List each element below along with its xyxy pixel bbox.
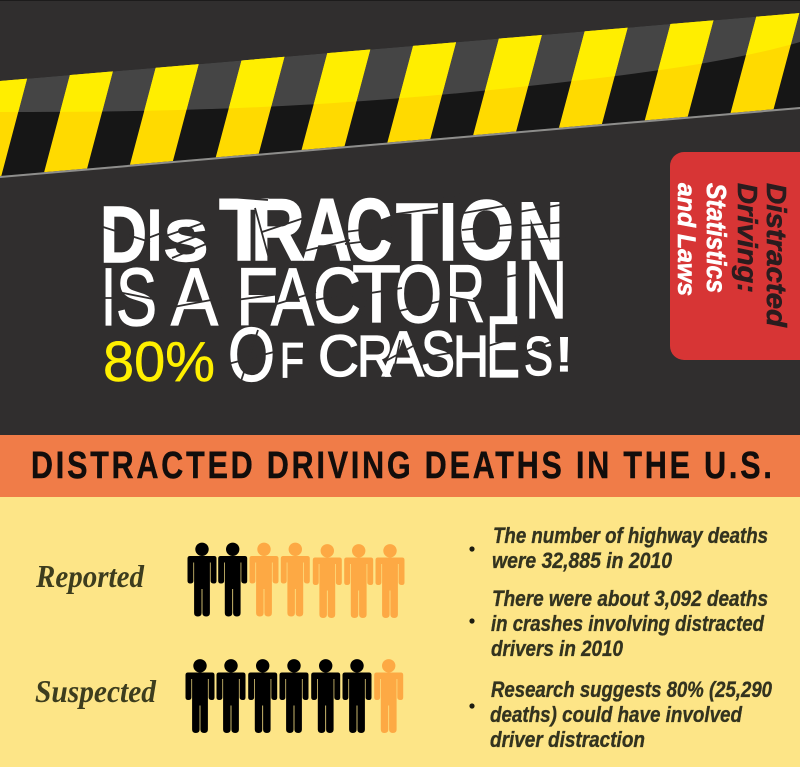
title line 3: of crashes: S: [421, 318, 455, 390]
title crack marks: [100, 194, 566, 384]
side tab text: and Laws: [672, 183, 700, 296]
bullet: distracted driver deaths: [469, 586, 768, 661]
title line 1: N: [518, 186, 563, 277]
orange section banner: [0, 435, 800, 497]
title line 2: T: [352, 249, 401, 340]
panel: yellow statistics background: [0, 497, 800, 767]
title line 3: of crashes: !: [555, 329, 573, 382]
title line 1: I: [147, 196, 162, 276]
title line 1: R: [251, 180, 305, 279]
bullet: highway deaths: [469, 523, 768, 573]
title line 1: T: [396, 187, 438, 278]
side tab text: Distracted: [761, 183, 792, 328]
pictogram: suspected deaths, 6 of 7: [186, 659, 403, 733]
title line 3: of crashes: H: [453, 324, 489, 389]
bullet: highway deaths: were 32,885 in 2010: [492, 548, 673, 573]
title line 3: of crashes: A: [382, 318, 424, 390]
label: suspected: Suspected: [35, 673, 157, 709]
bullet: research suggests: driver distraction: [490, 727, 645, 752]
section heading: DISTRACTED DRIVING DEATHS IN THE U.S.: [31, 445, 772, 487]
side tab text: [672, 183, 792, 328]
title line 2: [101, 245, 567, 343]
title line 1: A: [302, 180, 352, 279]
title line 2: A: [171, 252, 218, 343]
label: reported: Reported: [35, 558, 145, 594]
bullet: research suggests: deaths) could have involved: [490, 702, 742, 727]
title line 1: S: [164, 209, 208, 274]
dark header background: [0, 0, 800, 435]
bullet: research suggests: [469, 677, 773, 752]
title line 1: [100, 180, 563, 279]
title line 3: of crashes: F: [280, 334, 304, 388]
side tab text: Driving:: [732, 183, 763, 293]
title line 2: I: [101, 252, 116, 343]
side tab text: Statistics: [701, 183, 732, 293]
caution tape: [0, 13, 800, 178]
title line 3: of crashes: C: [318, 324, 359, 389]
title line 2: F: [236, 252, 278, 343]
title line 2: A: [271, 252, 314, 343]
title line 1: T: [219, 180, 269, 279]
title line 2: O: [395, 249, 442, 340]
title line 3: of crashes: O: [228, 313, 275, 398]
bullet: distracted driver deaths: drivers in 2010: [491, 636, 624, 661]
title line 3: of crashes: [228, 299, 573, 398]
title line 3: of crashes: E: [486, 299, 520, 396]
title line 1: C: [346, 180, 392, 279]
title line 3: 80%: 80%: [103, 330, 215, 394]
pictogram: reported deaths, 2 of 7: [188, 543, 404, 618]
title line 2: R: [446, 249, 485, 340]
title line 2: N: [525, 245, 567, 336]
title: distraction is a factor in 80% of crashes: [100, 180, 573, 398]
title line 2: I: [501, 245, 522, 336]
title line 3: of crashes: S: [524, 325, 553, 387]
panel: red side tab: [670, 152, 800, 360]
title line 1: O: [459, 183, 514, 277]
title line 2: C: [313, 251, 361, 339]
title line 1: D: [100, 190, 147, 279]
title line 3: of crashes: R: [357, 324, 393, 389]
title line 1: I: [439, 187, 457, 278]
title line 2: S: [116, 252, 157, 343]
